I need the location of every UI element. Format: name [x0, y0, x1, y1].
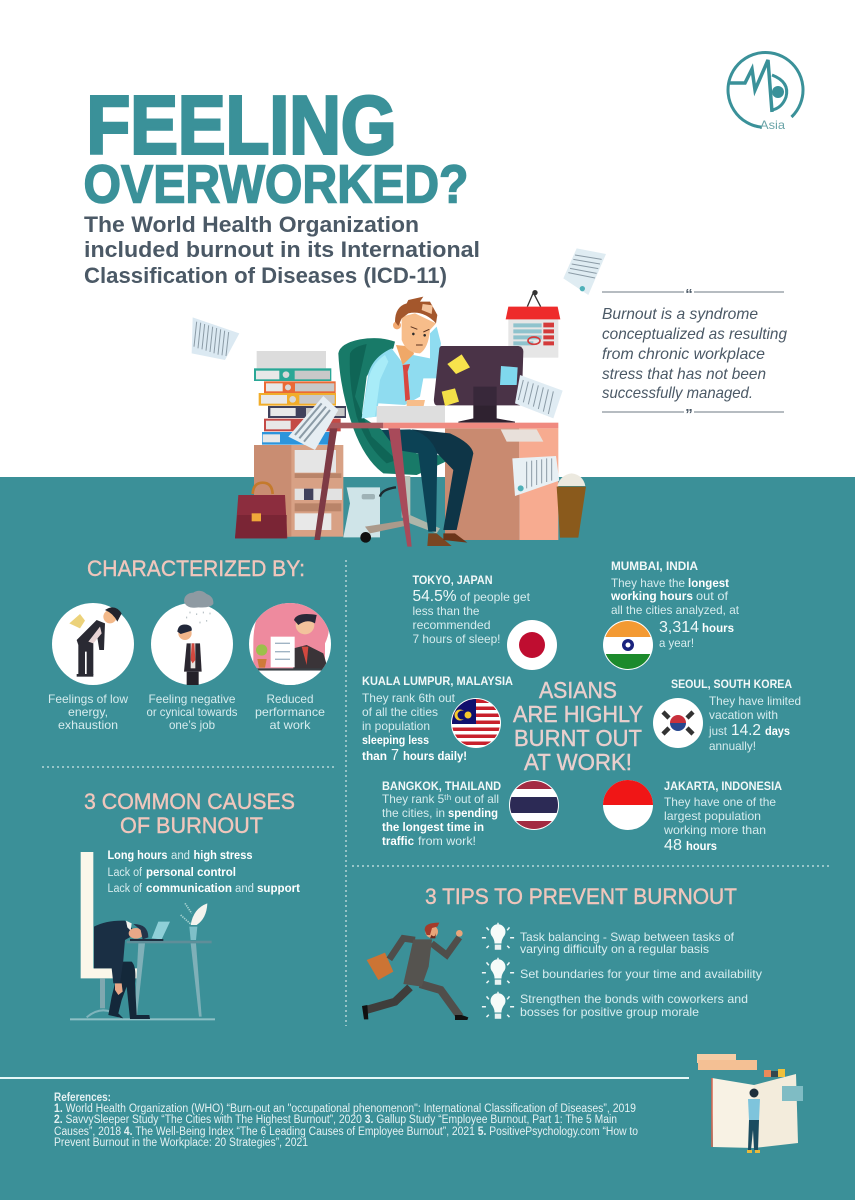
text: seoul: SEOUL, SOUTH KOREA [671, 679, 792, 691]
text: characteristics captions: one’s job [169, 718, 215, 732]
text: tokyo: recommended [412, 618, 490, 632]
references divider [0, 1077, 689, 1079]
text: tokyo: 54.5% [412, 588, 456, 605]
heading: common causes: OF BURNOUT [120, 813, 263, 838]
text: tokyo: TOKYO, JAPAN [412, 575, 492, 587]
text: jakarta: 48 [664, 837, 682, 854]
quote [602, 286, 787, 423]
sticky note [500, 366, 518, 385]
flag: india [603, 620, 653, 671]
shirt sleeve [362, 355, 388, 418]
flag: south korea [653, 698, 703, 748]
monitor stand [458, 403, 515, 423]
paper on binders [288, 396, 338, 450]
text: mumbai: MUMBAI, INDIA [611, 561, 698, 573]
text: characteristics captions: Feelings of low [48, 692, 128, 706]
monitor [434, 346, 523, 405]
text: causes list: Lack of [108, 883, 143, 895]
icon: floating paper top right [563, 248, 606, 295]
text: tokyo [412, 575, 531, 646]
icon: wall calendar [506, 290, 560, 358]
text: causes list: Lack of [108, 867, 143, 879]
text: causes list: support [257, 883, 300, 895]
monitor neck [473, 387, 497, 405]
text: mumbai: longest [688, 576, 729, 590]
stack of paper [257, 351, 326, 368]
heading: characterized by: CHARACTERIZED BY: [87, 556, 305, 581]
desk top and legs [303, 423, 558, 547]
text: jakarta: They have one of the [664, 795, 776, 809]
text: tips list: Set boundaries for your time and availability [520, 967, 762, 981]
text: references: 2. SavvySleeper Study “The Cities with The Highest Burnout”, 2020 3. Gallup Study “Employee Burnout, Part 1: The 5 Main [54, 1114, 617, 1126]
text: causes list: and [171, 850, 190, 862]
quote: successfully managed. [602, 385, 753, 402]
text: kuala lumpur: hours daily! [403, 749, 467, 763]
text: tips list [520, 930, 762, 1019]
briefcase [235, 483, 287, 538]
chair [338, 338, 457, 543]
quote: from chronic workplace [602, 346, 765, 363]
eyes [412, 333, 426, 337]
text: references: References: [54, 1092, 111, 1104]
laptop [130, 922, 170, 941]
text: kuala lumpur: of all the cities [362, 705, 438, 719]
left cabinet [254, 445, 343, 537]
shirt and raised arm [362, 327, 441, 418]
text: causes list [108, 850, 300, 895]
floor line [70, 1018, 215, 1020]
paper stack on desk [377, 406, 445, 423]
text: seoul: They have limited [709, 694, 801, 708]
logo [728, 52, 803, 132]
text: characteristics captions [48, 692, 325, 732]
text: causes list: and [235, 883, 254, 895]
text: references: 1. World Health Organization (WHO) “Burn-out an "occupational phenomenon": International Classification of Diseases”, 2019 [54, 1103, 636, 1115]
quote: stress that has not been [602, 366, 766, 383]
heading: tips: 3 TIPS TO PREVENT BURNOUT [425, 884, 737, 909]
heading: asians burnt out: AT WORK! [524, 749, 632, 775]
text: characteristics captions: at work [270, 718, 312, 732]
text: tokyo: 7 hours of sleep! [412, 632, 500, 646]
text: jakarta: hours [686, 839, 717, 853]
text: bangkok: They rank 5ᵗʰ out of all [382, 792, 499, 806]
heading: asians burnt out: ARE HIGHLY [513, 701, 643, 727]
text: tips list: bosses for positive group morale [520, 1005, 699, 1019]
man legs [108, 962, 150, 1019]
text: bangkok [382, 781, 501, 848]
text: bangkok: the cities, in [382, 806, 445, 820]
facial features [411, 327, 429, 345]
text: seoul: just [708, 724, 728, 738]
illustration: overworked man at desk [192, 248, 606, 547]
icon: floating paper left [192, 317, 239, 360]
flag: malaysia [450, 698, 502, 748]
hand [115, 983, 123, 995]
text: bangkok: BANGKOK, THAILAND [382, 781, 501, 793]
title: FEELING [86, 78, 396, 172]
filing box [343, 487, 380, 537]
man: upper body [362, 297, 523, 423]
heading: common causes: 3 COMMON CAUSES [84, 789, 295, 814]
text: kuala lumpur: They rank 6th out [362, 691, 456, 705]
text: kuala lumpur: in population [362, 719, 430, 733]
text: characteristics captions: or cynical towards [146, 705, 238, 719]
sticky note [447, 354, 470, 374]
text: characteristics captions: Feeling negative [148, 692, 236, 706]
flag: thailand [509, 780, 559, 830]
flag: indonesia [603, 780, 653, 830]
desk pedestal [445, 428, 558, 540]
icon: worker under rain cloud [151, 591, 233, 685]
chair [81, 852, 138, 1017]
text: tokyo: of people get [460, 590, 531, 604]
text: mumbai: 3,314 [659, 619, 699, 636]
plant in vase [181, 903, 207, 940]
hand [407, 400, 425, 407]
quote: ” [685, 406, 693, 423]
text: seoul: annually! [709, 739, 756, 753]
text: seoul: 14.2 [731, 722, 761, 739]
text: jakarta: working more than [663, 823, 766, 837]
text: kuala lumpur [362, 676, 513, 764]
text: bangkok: the longest time in [382, 820, 484, 834]
text: mumbai: hours [702, 621, 734, 635]
hair [395, 297, 437, 326]
text: causes list: Long hours [108, 850, 168, 862]
subtitle [84, 212, 480, 288]
flag: japan [507, 620, 557, 670]
text: references: Causes”, 2018 4. The Well-Being Index “The 6 Leading Causes of Employee Burnout”, 2021 5. PositivePsychology.com “How to [54, 1126, 638, 1138]
text: tips list: Strengthen the bonds with coworkers and [520, 992, 748, 1006]
text: jakarta: JAKARTA, INDONESIA [664, 781, 782, 793]
heading: common causes [84, 789, 295, 838]
face [402, 313, 436, 353]
text: tips list: Task balancing - Swap between tasks of [520, 930, 735, 944]
necktie [403, 364, 410, 401]
subtitle: Classification of Diseases (ICD-11) [84, 263, 447, 288]
icon: lightbulbs [482, 923, 514, 1019]
text: causes list: personal control [146, 867, 236, 879]
text: bangkok: traffic [382, 834, 414, 848]
illustration: running businessman [362, 923, 468, 1020]
text: tokyo: less than the [412, 604, 480, 618]
text: characteristics captions: performance [255, 705, 325, 719]
text: mumbai [610, 561, 740, 650]
sticky note [442, 388, 459, 406]
heading: asians burnt out: BURNT OUT [514, 725, 642, 751]
text: mumbai: all the cities analyzed, at [611, 603, 740, 617]
text: references: Prevent Burnout in the Workplace: 20 Strategies”, 2021 [54, 1137, 308, 1149]
text: mumbai: working hours [610, 589, 693, 603]
ear [393, 321, 401, 329]
heading: asians burnt out: ASIANS [539, 677, 617, 703]
text: seoul: days [765, 724, 790, 738]
text: characteristics captions: exhaustion [58, 718, 118, 732]
text: seoul [671, 679, 801, 753]
text: kuala lumpur: KUALA LUMPUR, MALAYSIA [362, 676, 513, 688]
man: legs and shoes [382, 429, 473, 546]
text: bangkok: from work! [418, 834, 476, 848]
binders [254, 368, 346, 445]
quote: “ [685, 286, 693, 303]
text: kuala lumpur: 7 [391, 747, 399, 764]
paper on desk pedestal [512, 456, 559, 496]
icon: reduced performance [249, 603, 331, 685]
text: jakarta [663, 781, 782, 854]
illustration: exhausted man at table [70, 852, 215, 1020]
subtitle: The World Health Organization [84, 212, 419, 237]
illustration: reader and open book [697, 1054, 803, 1153]
head [129, 928, 143, 939]
collar [126, 921, 132, 931]
text: mumbai: a year! [659, 636, 694, 650]
text: causes list: high stress [194, 850, 252, 862]
floating paper by monitor [515, 375, 563, 418]
subtitle: included burnout in its International [84, 237, 480, 262]
text: characteristics captions: Reduced [266, 692, 314, 706]
text: bangkok: spending [448, 806, 498, 820]
quote: conceptualized as resulting [602, 326, 787, 343]
title [84, 78, 468, 214]
text: jakarta: largest population [664, 809, 761, 823]
text: characteristics captions: energy, [68, 705, 108, 719]
text: mumbai: out of [696, 589, 729, 603]
hair [133, 924, 148, 939]
man torso [94, 921, 137, 983]
text: kuala lumpur: than [362, 749, 387, 763]
icon: worn-out wind-up worker [52, 603, 134, 685]
text: mumbai: They have the [611, 576, 685, 590]
heading: asians burnt out [513, 677, 643, 775]
logo: Asia [760, 118, 785, 132]
text: tips list: varying difficulty on a regular basis [520, 942, 709, 956]
text: references [54, 1092, 638, 1149]
wastebasket [557, 473, 586, 538]
text: seoul: vacation with [709, 708, 778, 722]
table [127, 941, 212, 1018]
text: causes list: communication [146, 883, 232, 895]
hand in hair [422, 304, 433, 314]
title: OVERWORKED? [84, 154, 468, 214]
quote: Burnout is a syndrome [602, 306, 758, 323]
text: kuala lumpur: sleeping less [362, 733, 429, 747]
neck [396, 345, 414, 365]
